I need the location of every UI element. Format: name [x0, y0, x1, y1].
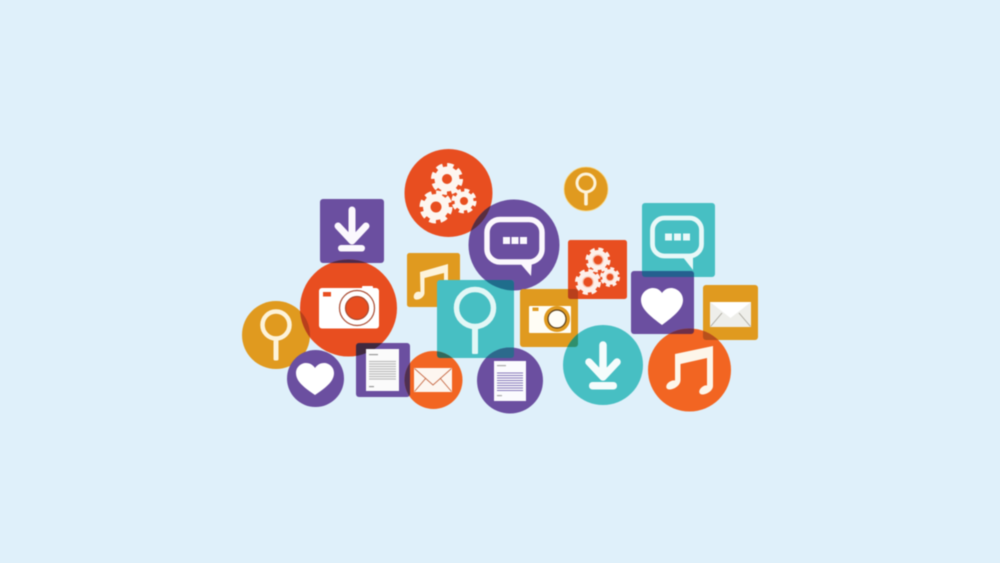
icon: speech bubble purple circle: [468, 200, 560, 290]
icon: gold magnifier circle: [242, 301, 310, 369]
icon: music gold square: [407, 253, 460, 307]
icon: gears orange circle: [404, 149, 492, 237]
icon: gears red square: [568, 240, 627, 299]
icon: camera orange circle: [300, 260, 397, 356]
icon: magnifier teal square: [437, 280, 514, 358]
icon: camera gold square: [520, 289, 578, 347]
icon: document purple square: [356, 343, 410, 397]
icon: envelope gold square: [703, 285, 758, 340]
icon: document purple circle: [477, 348, 543, 414]
icon: download purple square: [320, 199, 384, 263]
icon: download teal circle: [563, 325, 643, 405]
icon: music orange circle: [648, 328, 731, 412]
icon: small gold magnifier circle: [564, 167, 608, 211]
icon: heart purple circle: [287, 350, 344, 407]
icon: envelope orange circle: [404, 351, 462, 409]
icon: speech bubble teal square: [642, 203, 715, 277]
icon: heart purple square: [631, 271, 694, 334]
